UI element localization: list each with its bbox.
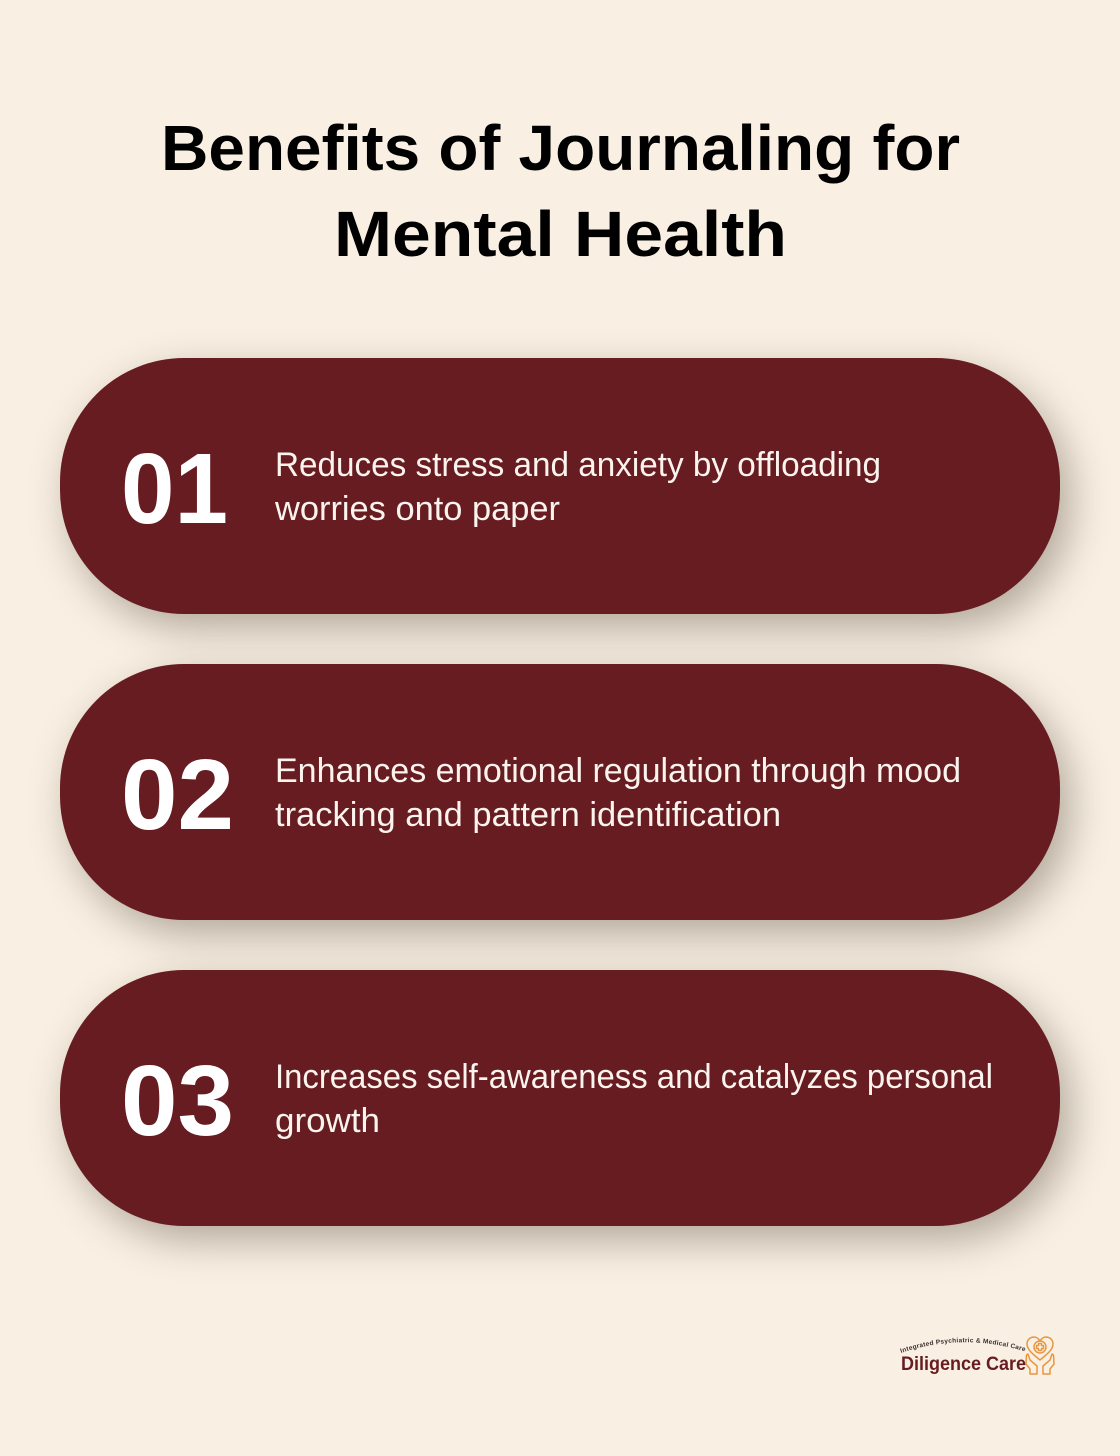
benefit text 03: growth	[275, 1102, 380, 1140]
logo wordmark: Diligence Care	[901, 1354, 1026, 1375]
number 01: 01	[121, 433, 228, 545]
title	[161, 112, 960, 270]
benefit text 01: Reduces stress and anxiety by offloading	[275, 446, 881, 484]
logo tagline: Integrated Psychiatric & Medical Care	[900, 1338, 1026, 1353]
benefit text 01: worries onto paper	[274, 490, 560, 528]
benefit text 02: tracking and pattern identification	[275, 796, 781, 834]
title: Benefits of Journaling for	[161, 112, 960, 184]
benefit text 01	[274, 446, 881, 528]
title: Mental Health	[334, 198, 787, 270]
panel: benefit 01	[60, 358, 1060, 614]
benefit text 02: Enhances emotional regulation through mood	[275, 752, 961, 790]
panel: benefit 02	[60, 664, 1060, 920]
benefit text 03: Increases self-awareness and catalyzes personal	[275, 1058, 993, 1096]
benefit text 02	[275, 752, 961, 834]
icon: heart with cross and hands	[1026, 1337, 1054, 1374]
panel: benefit 03	[60, 970, 1060, 1226]
benefit text 03	[275, 1058, 993, 1140]
number 02: 02	[121, 739, 234, 851]
number 03: 03	[121, 1045, 234, 1157]
